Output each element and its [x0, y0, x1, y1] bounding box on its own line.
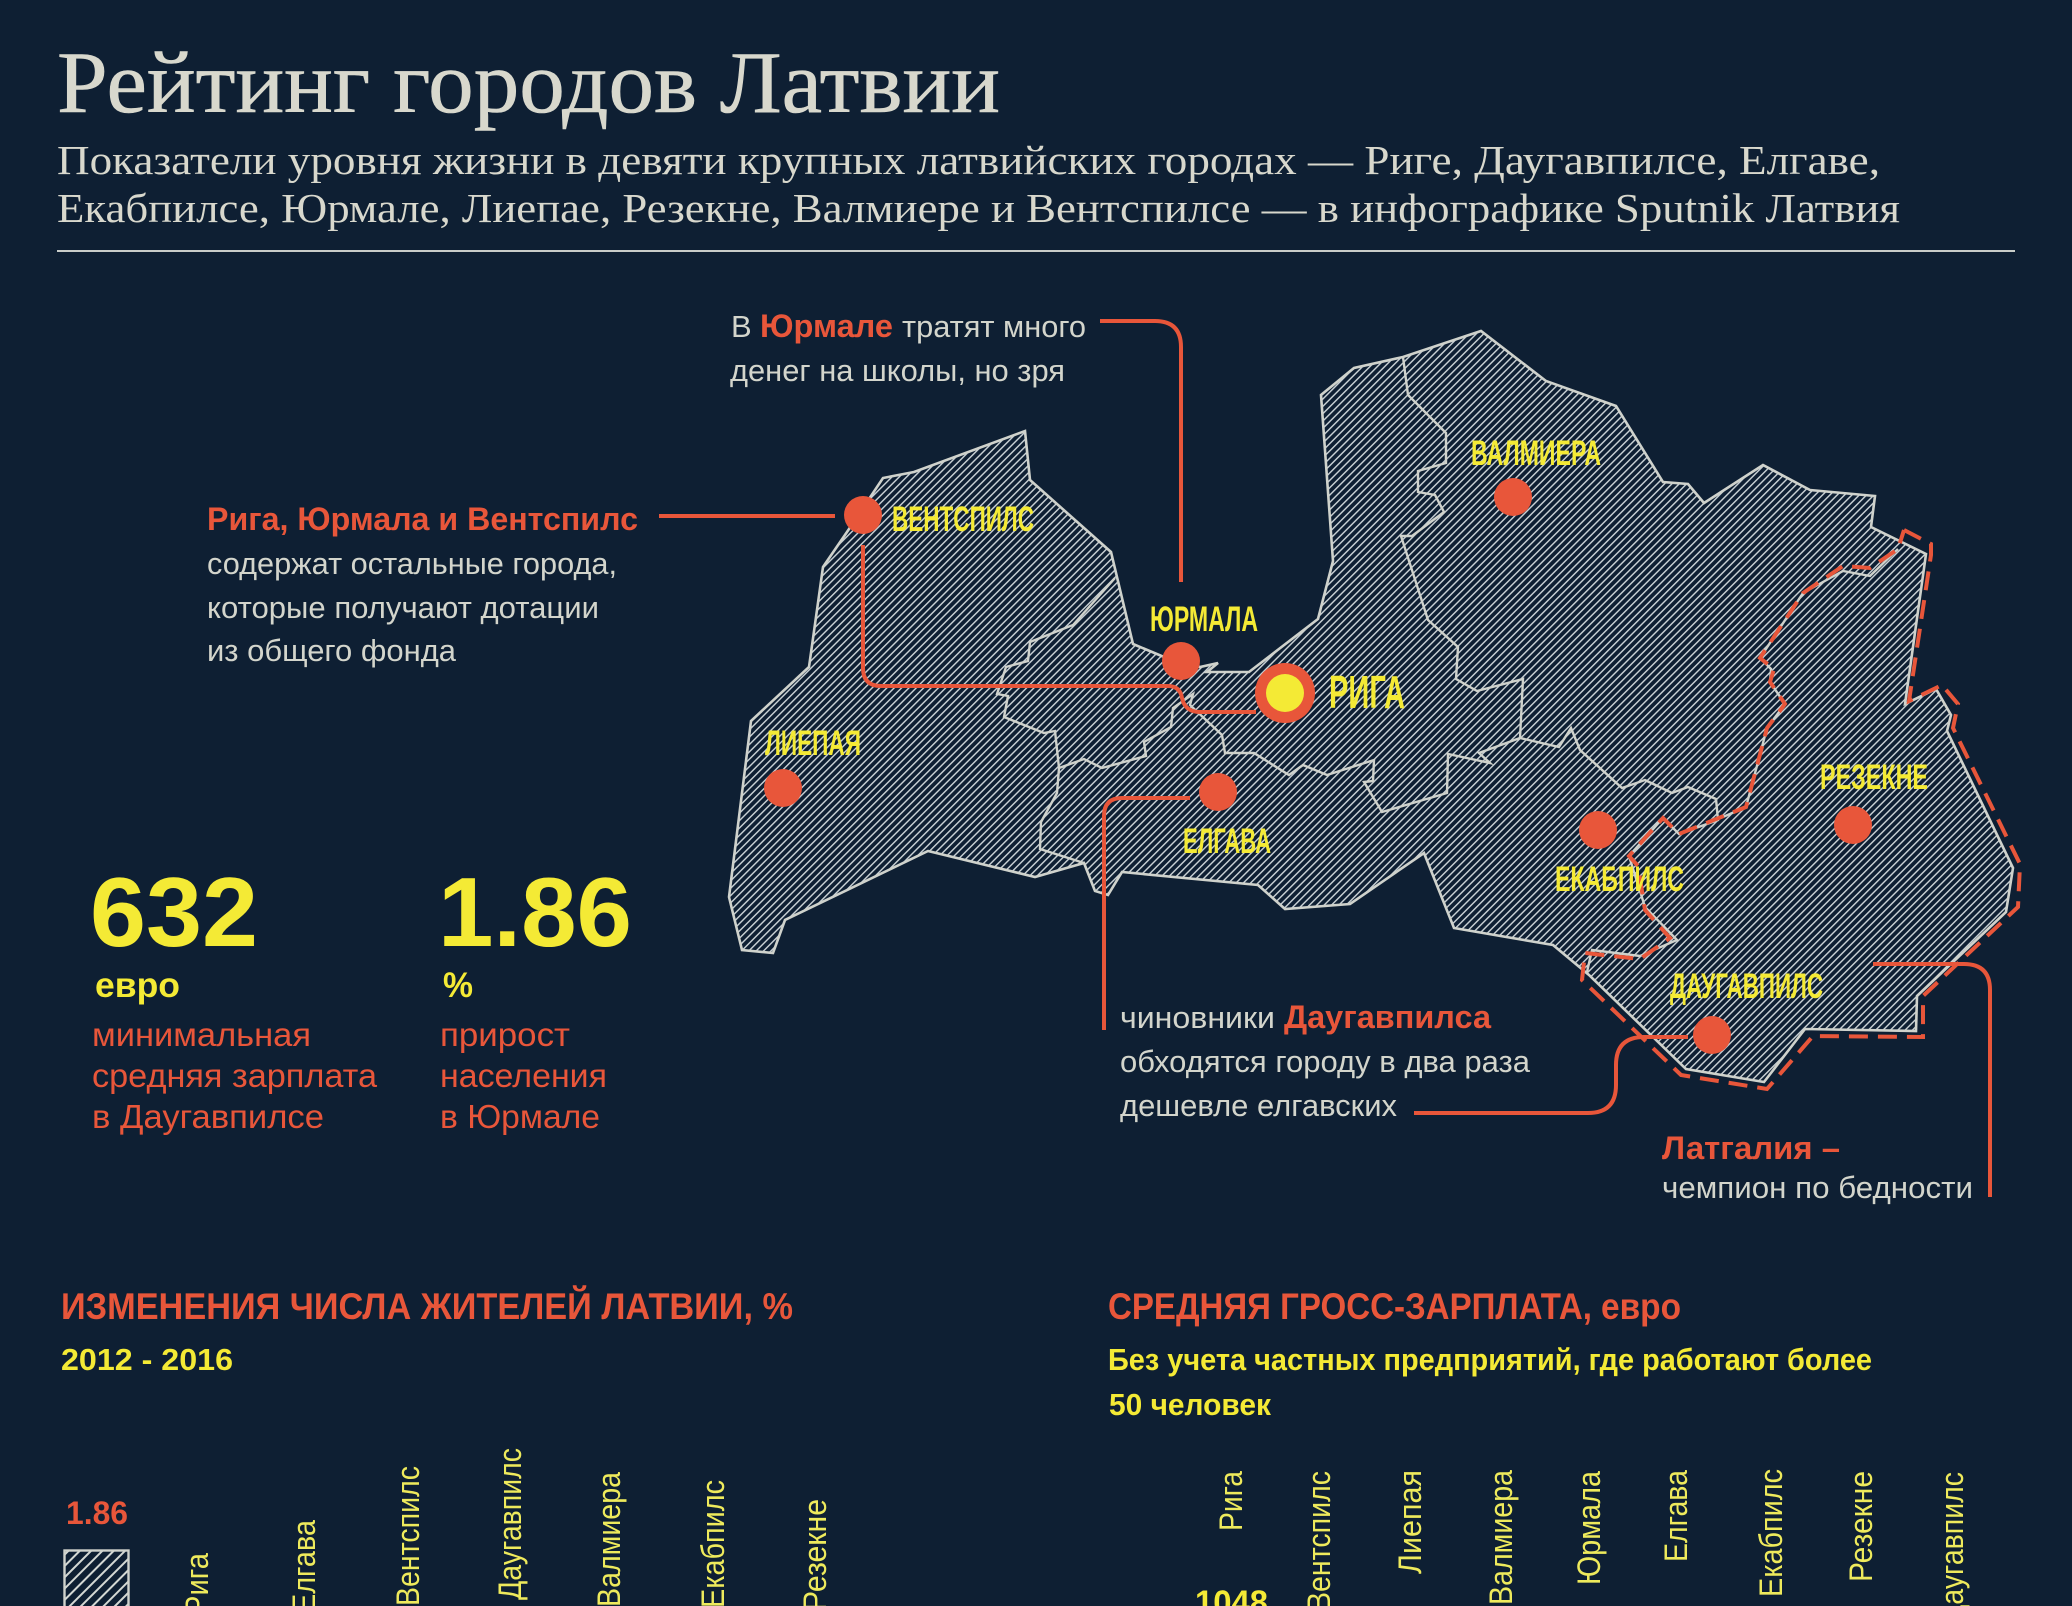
city marker: Jurmala: ЮРМАЛА: [1150, 600, 1258, 639]
bar chart: average gross salary: Юрмала: [1571, 1471, 1607, 1585]
bar chart: average gross salary: Резекне: [1843, 1471, 1879, 1582]
bar chart: population change: 1.86: [66, 1495, 128, 1531]
stat: minimum salary: в Даугавпилсе: [92, 1098, 324, 1135]
callout: donor cities: содержат остальные города,: [207, 546, 617, 581]
stat: population growth: населения: [440, 1057, 607, 1094]
bar chart: average gross salary: Екабпилс: [1753, 1469, 1789, 1597]
map outline: [729, 331, 2013, 1082]
city marker: Liepaja: ЛИЕПАЯ: [765, 724, 861, 763]
title: Рейтинг городов Латвии: [57, 35, 1000, 132]
heading: population change: [61, 1285, 793, 1377]
bar chart: population change: Вентспилс: [390, 1466, 426, 1606]
city marker: Jurmala: [1150, 600, 1258, 680]
callout: Daugavpils officials: чиновники: [1120, 1000, 1275, 1035]
bar chart: population change: Даугавпилс: [492, 1448, 528, 1600]
map of Latvia: [729, 331, 2020, 1089]
heading: average gross salary: СРЕДНЯЯ ГРОСС-ЗАРПЛАТА,: [1108, 1286, 1592, 1327]
callout: Daugavpils officials: дешевле елгавских: [1120, 1088, 1397, 1123]
city marker: Jekabpils: [1555, 811, 1684, 899]
stat: population growth: 1.86: [438, 857, 632, 967]
connector: Jurmala callout: [1100, 321, 1181, 582]
stat: population growth: прирост: [440, 1016, 570, 1053]
callout: donor cities: которые получают дотации: [207, 590, 599, 625]
stat: minimum salary: минимальная: [92, 1016, 311, 1053]
heading: population change: ИЗМЕНЕНИЯ ЧИСЛА ЖИТЕЛЕЙ ЛАТВИИ, %: [61, 1285, 793, 1327]
callout: Jurmala schools: Юрмале: [760, 308, 893, 344]
subtitle: Показатели уровня жизни в девяти крупных латвийских городах — Риге, Даугавпилсе, Елгаве,: [57, 137, 1880, 183]
bar chart: population change: Екабпилс: [695, 1480, 731, 1606]
callout: Latgale: чемпион по бедности: [1662, 1170, 1973, 1205]
city marker: Valmiera: ВАЛМИЕРА: [1471, 434, 1601, 473]
city marker: Liepaja: [764, 724, 861, 807]
city marker: Jelgava: [1183, 773, 1271, 861]
city marker: Jekabpils: ЕКАБПИЛС: [1555, 860, 1684, 899]
callout: Daugavpils officials: Даугавпилса: [1284, 999, 1491, 1035]
connector: Latgale: [1873, 964, 1990, 1197]
city marker: Daugavpils: ДАУГАВПИЛС: [1670, 967, 1823, 1006]
city marker: Ventspils: [844, 496, 1034, 539]
stat: minimum salary: [90, 857, 378, 1135]
callout: Jurmala schools: денег на школы, но зря: [730, 353, 1065, 388]
bar chart: average gross salary: Лиепая: [1392, 1470, 1428, 1574]
city marker: Riga: РИГА: [1329, 666, 1405, 718]
heading: population change: 2012 - 2016: [61, 1342, 233, 1377]
callout: Latgale: Латгалия –: [1662, 1130, 1840, 1166]
callout: donor cities: Рига, Юрмала и Вентспилс: [207, 501, 638, 537]
stat: minimum salary: 632: [90, 857, 258, 967]
callout: donor cities: [207, 501, 638, 668]
bar chart: average gross salary: Рига: [1213, 1471, 1249, 1531]
connector: Ventspils to main callout: [659, 514, 835, 518]
bar chart: average gross salary: [1195, 1469, 1970, 1606]
bar chart: population change: [64, 1448, 833, 1606]
heading: average gross salary: Без учета частных предприятий, где работают более: [1108, 1342, 1872, 1377]
subtitle: [57, 137, 1900, 231]
connector: Elgava to Daugavpils callout: [1104, 798, 1190, 1030]
city marker: Rezekne: [1820, 758, 1928, 844]
Latgale dashed boundary: [1582, 530, 2020, 1089]
city marker: Rezekne: РЕЗЕКНЕ: [1820, 758, 1928, 797]
city marker: Daugavpils: [1670, 967, 1823, 1054]
callout: donor cities: из общего фонда: [207, 633, 457, 668]
connector: Ventspils to Riga: [863, 545, 1256, 712]
heading: average gross salary: 50 человек: [1109, 1387, 1271, 1422]
callout: Jurmala schools: тратят много: [902, 309, 1086, 344]
city marker: Jelgava: ЕЛГАВА: [1183, 822, 1271, 861]
heading: average gross salary: евро: [1601, 1286, 1681, 1327]
bar chart: population change: Валмиера: [591, 1472, 627, 1606]
connector: Daugavpils: [1414, 1037, 1688, 1113]
callout: Jurmala schools: В: [731, 309, 752, 344]
regional borders: [997, 357, 1898, 972]
city marker: Riga: [1255, 663, 1405, 723]
subtitle: Екабпилсе, Юрмале, Лиепае, Резекне, Валмиере и Вентспилсе — в инфографике Sputnik Латвия: [57, 185, 1900, 231]
bar chart: average gross salary: Валмиера: [1483, 1470, 1519, 1605]
callout: Daugavpils officials: [1120, 999, 1531, 1123]
stat: minimum salary: средняя зарплата: [92, 1057, 378, 1094]
stat: population growth: [438, 857, 632, 1135]
callout: Daugavpils officials: обходятся городу в два раза: [1120, 1044, 1531, 1079]
callout: Jurmala schools: [730, 308, 1086, 388]
stat: population growth: в Юрмале: [440, 1098, 600, 1135]
city marker: Valmiera: [1471, 434, 1601, 516]
stat: minimum salary: евро: [95, 966, 180, 1005]
bar chart: average gross salary: Елгава: [1658, 1470, 1694, 1562]
city marker: Ventspils: ВЕНТСПИЛС: [892, 500, 1034, 539]
stat: population growth: %: [443, 966, 473, 1005]
heading: average gross salary: [1108, 1286, 1872, 1422]
callout: Latgale: [1662, 1130, 1973, 1205]
